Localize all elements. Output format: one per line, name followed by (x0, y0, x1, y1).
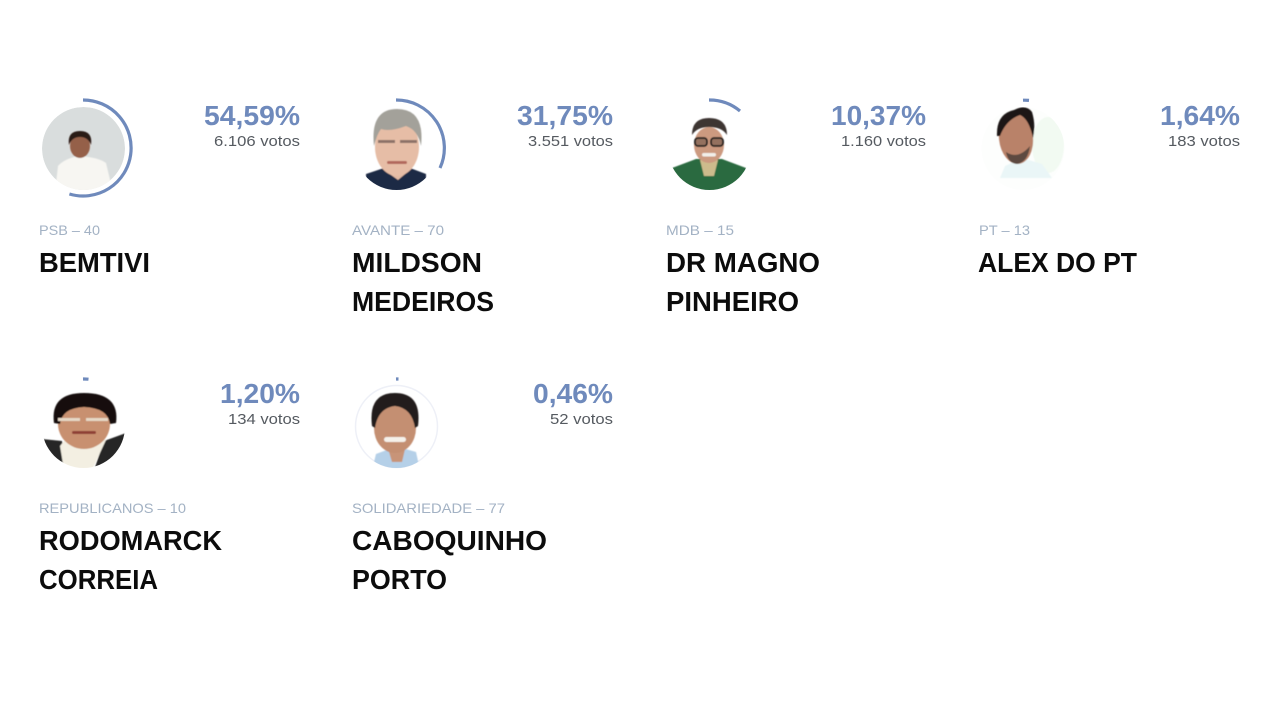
photo: Rodomarck Correia (42, 393, 126, 470)
name: CORREIA (39, 564, 158, 595)
party: SOLIDARIEDADE – 77 (352, 500, 505, 516)
votes: 6.106 votos (214, 133, 300, 150)
name: MILDSON (352, 247, 482, 278)
percentage: 54,59% (204, 100, 300, 131)
percentage: 1,64% (1160, 100, 1240, 131)
photo: Alex do PT (996, 107, 1064, 178)
progress ring 10,37% (709, 100, 740, 111)
panel: candidate Mildson Medeiros (352, 100, 613, 317)
party: PT – 13 (979, 222, 1030, 238)
name: ALEX DO PT (978, 247, 1137, 278)
name (352, 247, 494, 317)
progress ring 54,59% (69, 100, 131, 196)
name: PORTO (352, 564, 447, 595)
panel: candidate Bemtivi (39, 100, 300, 278)
photo: Mildson Medeiros (366, 109, 426, 192)
name: DR MAGNO (666, 247, 820, 278)
votes: 183 votos (1168, 133, 1240, 150)
panel: candidate Dr Magno Pinheiro (666, 100, 926, 317)
photo: Bemtivi (42, 107, 125, 192)
name: MEDEIROS (352, 286, 494, 317)
photo: Caboquinho Porto (356, 386, 438, 470)
progress ring 1,20% (83, 377, 88, 381)
progress ring 1,64% (1023, 99, 1029, 102)
name (39, 525, 222, 595)
votes: 52 votos (550, 411, 613, 428)
panel: candidate Rodomarck Correia (39, 378, 300, 595)
party: PSB – 40 (39, 222, 100, 238)
panel: candidate Caboquinho Porto (352, 378, 613, 595)
votes: 134 votos (228, 411, 300, 428)
name (666, 247, 820, 317)
party: MDB – 15 (666, 222, 734, 238)
percentage: 1,20% (220, 378, 300, 409)
photo: Dr Magno Pinheiro (672, 118, 746, 192)
name: BEMTIVI (39, 247, 150, 278)
panel: candidate Alex do PT (978, 100, 1240, 278)
name: RODOMARCK (39, 525, 222, 556)
name (352, 525, 547, 595)
percentage: 10,37% (831, 100, 926, 131)
name: PINHEIRO (666, 286, 799, 317)
votes: 1.160 votos (841, 133, 926, 150)
progress ring 31,75% (396, 100, 444, 168)
percentage: 0,46% (533, 378, 613, 409)
percentage: 31,75% (517, 100, 613, 131)
party: REPUBLICANOS – 10 (39, 500, 186, 516)
progress ring 0,46% (396, 377, 398, 381)
votes: 3.551 votos (528, 133, 613, 150)
name: CABOQUINHO (352, 525, 547, 556)
party: AVANTE – 70 (352, 222, 444, 238)
